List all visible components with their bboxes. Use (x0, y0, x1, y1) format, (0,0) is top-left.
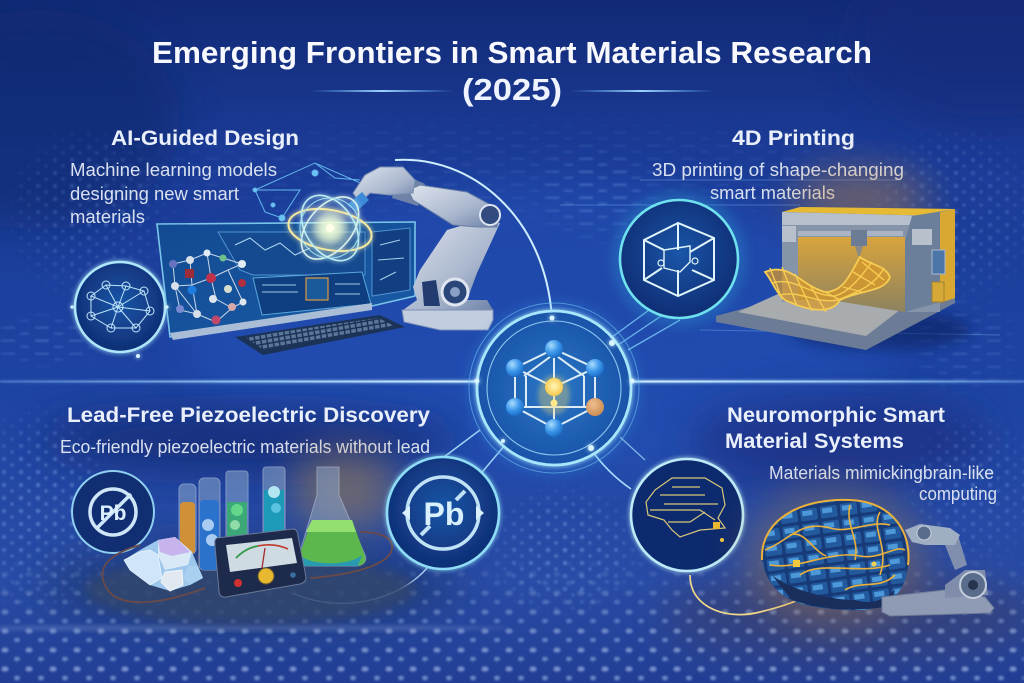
heading: AI-Guided Design: AI-Guided Design (111, 126, 299, 150)
test tubes (179, 467, 285, 570)
lab bench (85, 556, 415, 624)
heading: Neuromorphic Smart Material Systems: Material Systems (725, 429, 904, 453)
atom hologram (285, 185, 375, 271)
robot arm (347, 167, 500, 330)
icon: large Pb no-lead circle (387, 457, 499, 569)
icon: small Pb no-lead circle (72, 471, 154, 553)
title: (2025) (462, 72, 562, 107)
orange glow behind flask (290, 450, 400, 530)
heading: 4D Printing: 4D Printing (732, 126, 855, 150)
description: 4D printing: smart materials (710, 183, 835, 203)
icon: small Pb no-lead circle: Pb (100, 502, 126, 525)
description: AI-guided design: designing new smart (70, 184, 239, 204)
icon: large Pb no-lead circle: Pb (424, 496, 464, 532)
icon: circuit brain circle (631, 459, 743, 571)
laptop screen (157, 222, 415, 340)
hub: central molecule (466, 300, 642, 476)
panel: AI-guided design (70, 126, 500, 355)
description: 4D printing (652, 160, 904, 203)
icon: neural network circle (75, 262, 165, 352)
icon: wireframe cube circle (612, 192, 746, 326)
crystals (124, 537, 203, 591)
panel: 4D printing (612, 126, 970, 350)
description: neuromorphic systems (769, 463, 997, 504)
connector lines (0, 160, 1024, 615)
heading: Lead-Free Piezoelectric Discovery: Lead-Free Piezoelectric Discovery (67, 403, 430, 427)
description: AI-guided design: materials (70, 207, 145, 227)
heading: Neuromorphic Smart Material Systems: Neuromorphic Smart (727, 403, 945, 427)
glow points on rings (70, 305, 634, 451)
description: neuromorphic systems: computing (919, 484, 997, 504)
title (152, 35, 872, 107)
panel: neuromorphic systems (631, 403, 997, 625)
description: 4D printing: 3D printing of shape-changing (652, 160, 904, 180)
small robot arm (882, 524, 994, 616)
printer body (782, 207, 955, 312)
molecule network above screen (253, 163, 365, 221)
printer base (716, 296, 955, 350)
description: lead-free piezoelectric: Eco-friendly piezoelectric materials without lead (60, 437, 430, 457)
description: AI-guided design: Machine learning models (70, 160, 277, 180)
description: AI-guided design (70, 160, 277, 227)
description: neuromorphic systems: Materials mimickingbrain-like (769, 463, 994, 483)
cable (102, 532, 392, 602)
glowing AI brain (745, 485, 925, 625)
panel: lead-free piezoelectric (60, 403, 499, 624)
title: Emerging Frontiers in Smart Materials Research (152, 35, 872, 70)
heading: Neuromorphic Smart Material Systems (725, 403, 945, 453)
keyboard (235, 315, 405, 355)
3D printer (716, 170, 970, 350)
printed shape-changing mesh (765, 257, 890, 312)
conical flask (298, 467, 366, 566)
analog meter (215, 529, 306, 597)
